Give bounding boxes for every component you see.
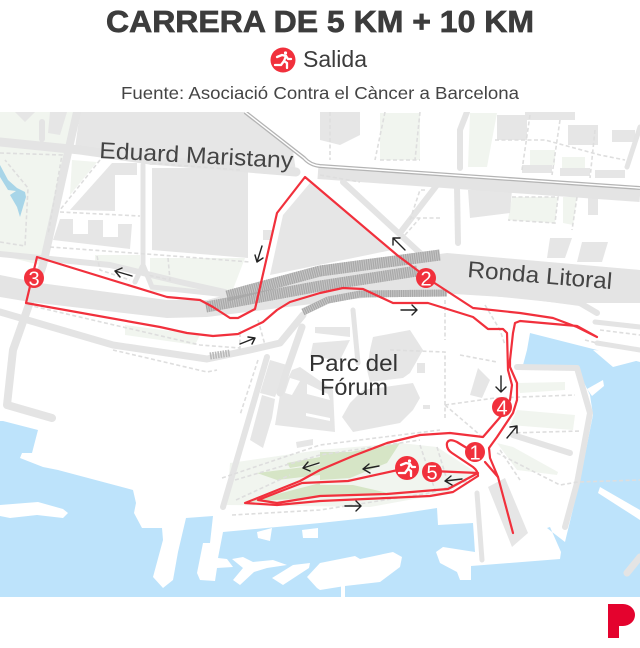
marker: salida <box>395 456 419 480</box>
marker 3 <box>24 268 44 288</box>
place label: Parc del Fórum <box>311 354 396 395</box>
road network <box>0 112 640 573</box>
marker 2: 2 <box>420 268 432 290</box>
logo <box>608 604 635 638</box>
street label: Eduard Maristany: Eduard Maristany <box>99 137 294 173</box>
place label: Parc del Fórum: Fórum <box>320 374 388 400</box>
ronda litoral motorway <box>0 253 640 318</box>
buildings <box>15 112 635 547</box>
marker 1 <box>465 442 485 462</box>
legend label: Salida <box>303 46 367 72</box>
marker 3: 3 <box>28 268 40 290</box>
place label: Parc del Fórum: Parc del <box>309 350 398 376</box>
lake <box>0 165 26 217</box>
parks and green areas <box>0 112 585 507</box>
marker 5 <box>422 462 442 482</box>
race route <box>26 177 597 533</box>
marker 4 <box>492 397 512 417</box>
source line: Fuente: Asociació Contra el Càncer a Barcelona <box>121 83 519 103</box>
building gaps <box>285 378 330 421</box>
water <box>0 333 640 597</box>
dashed paths <box>0 112 640 515</box>
direction arrows <box>115 238 517 511</box>
street label: Ronda Litoral: Ronda Litoral <box>467 256 613 294</box>
route markers <box>24 268 512 484</box>
legend: salida <box>270 46 367 72</box>
map <box>0 112 640 597</box>
marker 5: 5 <box>426 462 438 484</box>
marker 4: 4 <box>496 398 508 420</box>
marker 2 <box>416 268 436 288</box>
islands and piers <box>0 350 640 597</box>
tunnels <box>206 255 447 356</box>
title: CARRERA DE 5 KM + 10 KM <box>106 4 534 39</box>
railway line <box>245 112 640 188</box>
icon: runner legend <box>270 48 296 72</box>
marker 1: 1 <box>469 442 481 464</box>
